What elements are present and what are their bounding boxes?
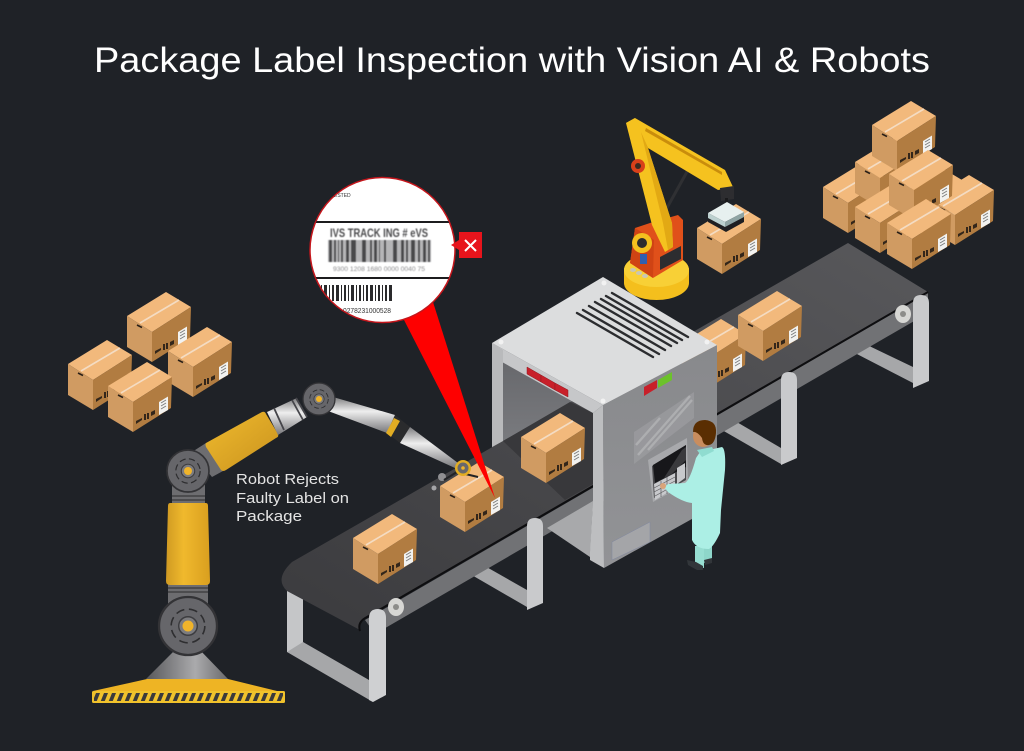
conveyor top surface [282, 243, 928, 630]
robot base [624, 253, 689, 300]
operator coat [664, 447, 725, 549]
upper barcode [328, 240, 431, 262]
packages on the conveyor behind the machine [682, 291, 802, 389]
robot upper neck [172, 485, 205, 505]
robot cone base [146, 647, 228, 679]
gripper plate [708, 202, 744, 232]
conveyor side band [365, 293, 928, 634]
red indicator lights above tunnel [527, 367, 568, 397]
large yellow and silver robot arm [92, 383, 478, 703]
robot gripper [720, 186, 734, 201]
robot joint: base [159, 597, 217, 655]
package held by yellow robot [697, 204, 761, 274]
inspection machine [492, 277, 717, 568]
package being rejected [440, 462, 504, 532]
label tracking heading: IVS TRACK ING # eVS [330, 226, 428, 240]
lower barcode [317, 285, 392, 301]
robot hazard platform [92, 679, 285, 703]
control panel [648, 438, 688, 502]
robot red body [630, 215, 683, 278]
machine top vents [577, 293, 688, 357]
robot support rod [663, 170, 688, 215]
operator legs [695, 546, 704, 568]
tunnel frame [492, 343, 603, 413]
person: operator [660, 420, 725, 570]
status lights [644, 372, 672, 396]
robot silver outer arm [328, 397, 395, 433]
magnified label circle [300, 178, 465, 322]
robot silver forearm [267, 398, 307, 435]
robot gripper [432, 460, 478, 490]
machine base [547, 501, 593, 557]
boxes: left stack [68, 292, 232, 432]
machine tunnel back wall [492, 343, 603, 470]
upper barcode number: 9300 1208 1680 0000 0040 75 [333, 266, 425, 273]
robot yellow upper arm [206, 412, 278, 471]
robot yellow lower arm [166, 503, 210, 585]
robot elbow connector [192, 443, 223, 477]
roller near [388, 598, 404, 616]
conveyor front supports and rollers [369, 295, 929, 702]
support 2 [527, 518, 543, 610]
red scan beam [403, 302, 495, 498]
machine top face [492, 277, 717, 405]
package inside the scanner [521, 413, 585, 483]
robot joint: shoulder [167, 450, 209, 492]
robot yellow arm [626, 118, 733, 252]
machine right face [603, 345, 717, 568]
caption: Robot Rejects [236, 471, 339, 488]
support 4 [913, 295, 929, 388]
title: Package Label Inspection with Vision AI & Robots [94, 41, 930, 80]
caption [236, 471, 349, 525]
caption: Faulty Label on [236, 490, 349, 507]
roller far [895, 305, 911, 323]
support 1 [369, 609, 386, 702]
robot joint: elbow [303, 383, 335, 415]
operator head [693, 420, 716, 447]
machine vent plate [612, 522, 650, 560]
conveyor rear supports [287, 343, 913, 702]
reject marker [451, 232, 482, 258]
package on conveyor [353, 514, 417, 584]
operator hand [660, 483, 666, 489]
conveyor belt [282, 243, 928, 634]
boxes: right stack [823, 101, 994, 269]
robot lower neck [168, 583, 208, 611]
yellow palletizing robot [624, 118, 734, 300]
magnified label circle: ESTED [334, 193, 351, 199]
caption: Package [236, 508, 302, 525]
lower barcode number: 0278231000528 [343, 308, 391, 315]
support 3 [781, 372, 797, 465]
